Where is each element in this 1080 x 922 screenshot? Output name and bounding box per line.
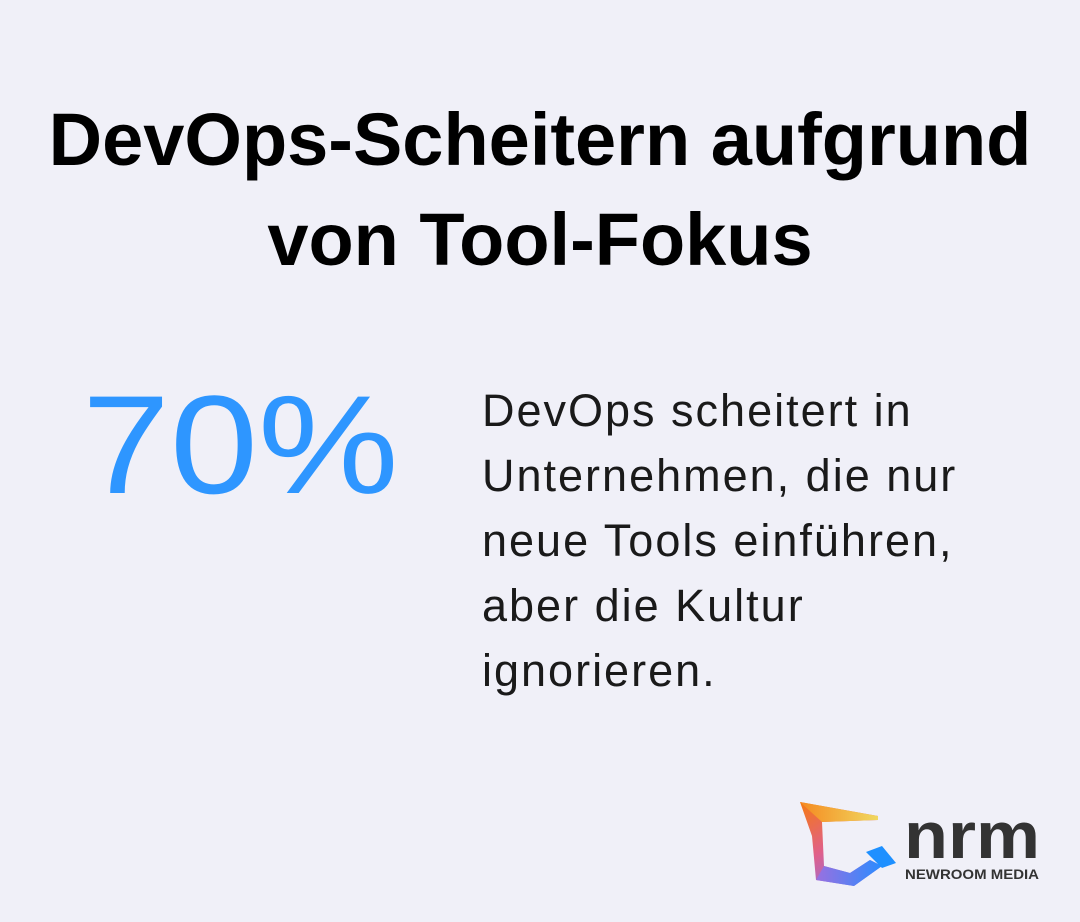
description text: aber die Kultur [482,580,805,631]
description text: neue Tools einführen, [482,515,954,566]
title: DevOps-Scheitern aufgrund [49,98,1031,181]
stat: 70%: 70% [82,366,399,523]
title: von Tool-Fokus [267,198,813,281]
description text [482,385,957,696]
description text: DevOps scheitert in [482,385,913,436]
logo: nrm newroom media [800,800,1040,886]
description text: Unternehmen, die nur [482,450,957,501]
title [49,98,1031,281]
logo: nrm newroom media: NEWROOM MEDIA [905,866,1039,882]
description text: ignorieren. [482,645,717,696]
logo: nrm newroom media: nrm [904,800,1040,872]
